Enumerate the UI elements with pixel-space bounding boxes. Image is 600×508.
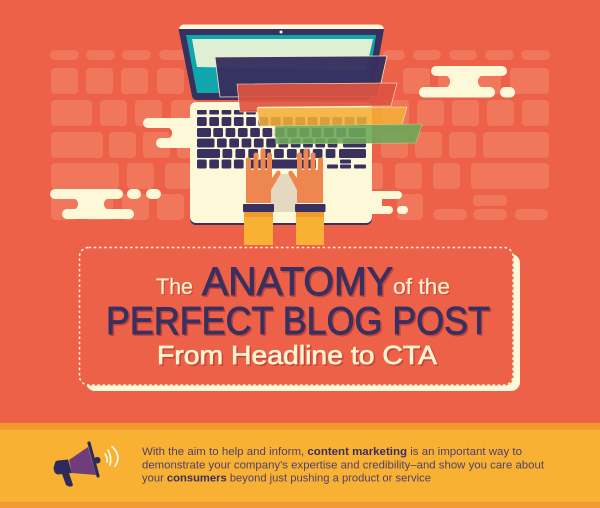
left hand and sleeve <box>243 148 281 245</box>
icon: megaphone <box>54 443 100 487</box>
title line 1: ANATOMY <box>202 260 393 304</box>
icon: sound waves <box>105 446 118 466</box>
right hand and sleeve <box>288 148 326 245</box>
laptop keyboard <box>197 110 367 168</box>
title line 1: The <box>156 274 193 299</box>
intro band <box>0 423 600 508</box>
floating layer: orange <box>257 107 407 126</box>
title line 1: The <box>157 275 194 300</box>
laptop base <box>190 102 372 225</box>
laptop screen lid <box>178 24 384 100</box>
background keyboard pattern <box>50 50 550 220</box>
title box <box>79 247 520 391</box>
cloud: lower right <box>365 191 408 214</box>
floating layer: red <box>237 83 397 112</box>
title line 2: PERFECT BLOG POST <box>108 302 492 344</box>
title line 1 <box>156 260 451 306</box>
cloud: upper right <box>419 66 515 98</box>
cloud: behind laptop left <box>143 118 198 148</box>
title <box>106 260 492 372</box>
title line 2: PERFECT BLOG POST <box>106 300 490 343</box>
subtitle: From Headline to CTA <box>157 340 438 370</box>
intro line 3: your consumers beyond just pushing a product or service <box>142 472 431 484</box>
floating layer: navy <box>215 56 387 97</box>
subtitle: From Headline to CTA <box>158 342 439 372</box>
title line 1: of the <box>394 275 451 300</box>
laptop <box>178 24 384 225</box>
title line 1: ANATOMY <box>204 262 394 306</box>
intro line 2: demonstrate your company's expertise and credibility–and show you care about <box>142 460 544 472</box>
trackpad <box>271 174 297 212</box>
floating layer: green <box>275 124 422 144</box>
intro line 1: With the aim to help and inform, content marketing is an important way to <box>142 446 522 458</box>
intro text <box>142 446 544 484</box>
title line 1: of the <box>393 274 450 299</box>
cloud: lower left <box>50 189 161 219</box>
